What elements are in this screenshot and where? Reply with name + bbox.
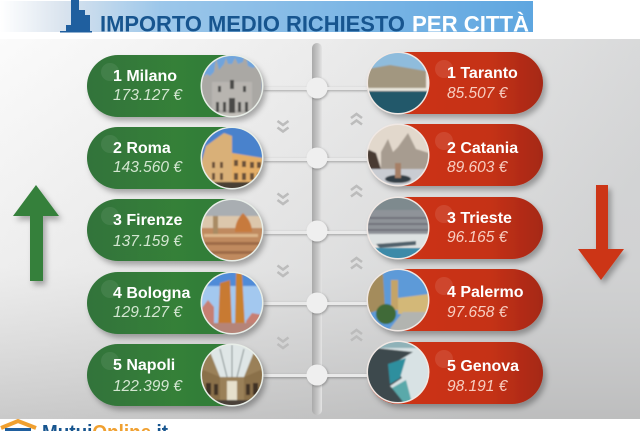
arrow down red: [578, 185, 624, 280]
photo: Galleria Umberto: [200, 343, 264, 407]
photo: Castello di Taranto: [366, 52, 430, 115]
photo: Trieste: [366, 196, 430, 260]
pill: 5 Genova: 98.191 €: [447, 378, 509, 395]
pill: 5 Napoli: 5 Napoli: [113, 357, 175, 374]
photo: Costa di Genova: [366, 340, 430, 404]
pill: 5 Genova: [366, 340, 543, 404]
pill: 3 Trieste: 3 Trieste: [447, 210, 512, 227]
title: IMPORTO MEDIO RICHIESTO: [100, 12, 405, 36]
photo: Duomo di Milano: [200, 52, 264, 118]
pill: 5 Napoli: [87, 343, 264, 407]
pill: 2 Roma: 143.560 €: [113, 159, 183, 176]
pill: 1 Milano: 1 Milano: [113, 68, 177, 85]
header band: [0, 0, 533, 36]
photo: Catania: [366, 124, 430, 187]
pill: 3 Firenze: 3 Firenze: [113, 212, 182, 229]
pill: 4 Bologna: 129.127 €: [113, 304, 183, 321]
pill: 3 Trieste: 96.165 €: [447, 229, 509, 246]
central timeline: [263, 43, 367, 415]
chevrons up: [351, 114, 362, 340]
pill: 1 Milano: 173.127 €: [113, 87, 183, 104]
pill: 3 Firenze: 137.159 €: [113, 233, 183, 250]
pill: 2 Catania: 2 Catania: [447, 140, 518, 157]
pill: 1 Taranto: [366, 52, 543, 115]
pill: 4 Bologna: [87, 272, 264, 335]
arrow up green: [13, 185, 59, 281]
pill: 4 Palermo: 97.658 €: [447, 304, 509, 321]
photo: Palermo: [366, 268, 430, 332]
pill: 4 Palermo: 4 Palermo: [447, 284, 524, 301]
icon: house roof: [1, 421, 36, 431]
pill: 1 Taranto: 85.507 €: [447, 85, 509, 102]
icon: city buildings: [60, 0, 92, 32]
pill: 2 Roma: [87, 126, 264, 190]
pill: 3 Firenze: [87, 198, 264, 262]
pill: 2 Catania: [366, 124, 543, 187]
pill: 5 Genova: 5 Genova: [447, 358, 519, 375]
photo: Firenze: [200, 198, 264, 262]
logo: MutuiOnline.it: [0, 419, 640, 431]
pill: 5 Napoli: 122.399 €: [113, 378, 183, 395]
photo: Colosseo: [200, 126, 264, 190]
chevrons down: [278, 121, 288, 348]
pill: 2 Roma: 2 Roma: [113, 140, 171, 157]
pill: 1 Taranto: 1 Taranto: [447, 65, 518, 82]
pill: 1 Milano: [87, 52, 264, 118]
pill: 4 Palermo: [366, 268, 543, 332]
pill: 4 Bologna: 4 Bologna: [113, 285, 190, 302]
pill: 2 Catania: 89.603 €: [447, 159, 509, 176]
title accent: PER CITTÀ: [412, 12, 529, 36]
pill: 3 Trieste: [366, 196, 543, 260]
photo: Due Torri: [200, 272, 264, 335]
